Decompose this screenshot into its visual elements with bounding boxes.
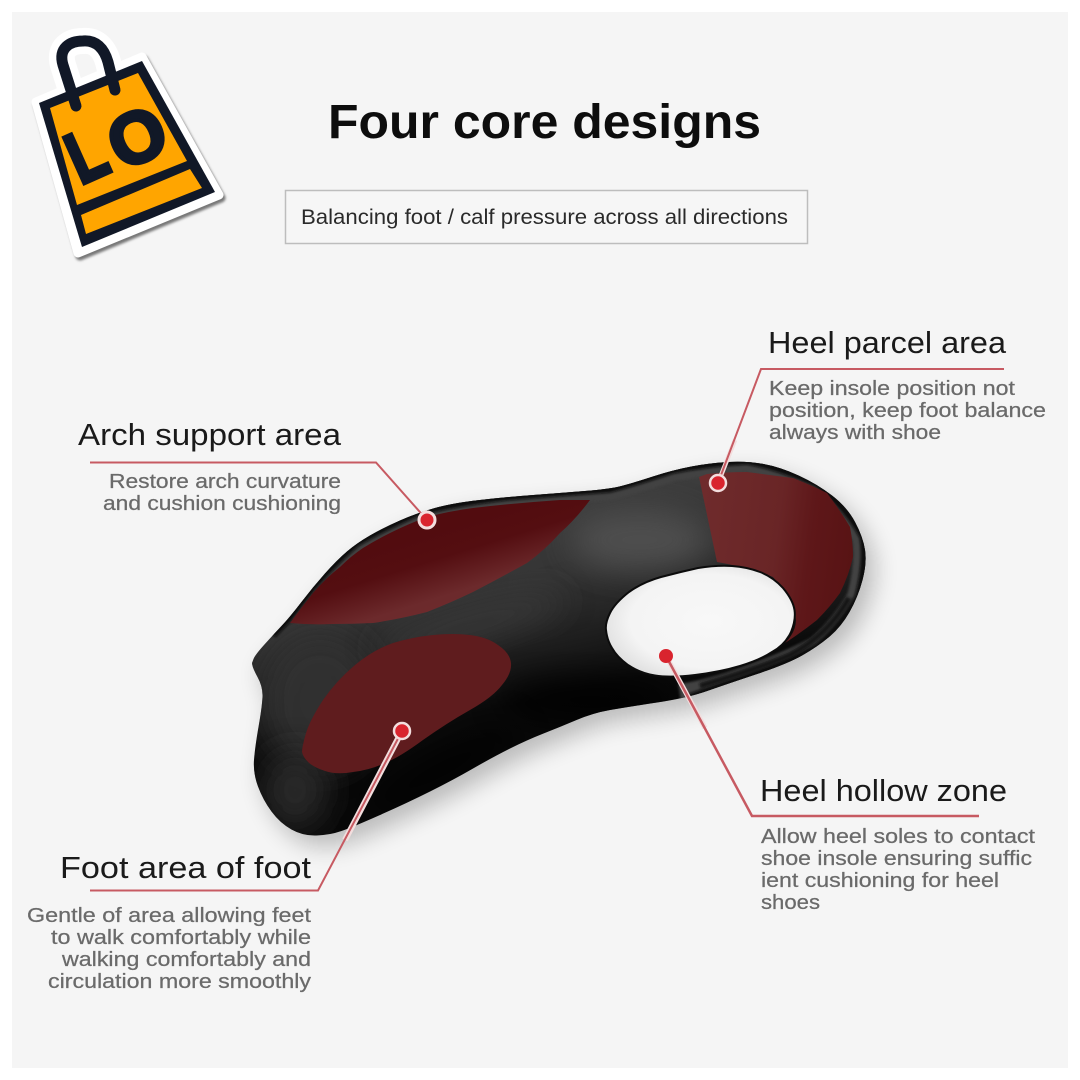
description: shoes — [761, 892, 820, 914]
title: Four core designs — [328, 96, 761, 149]
description: to walk comfortably while — [51, 927, 311, 949]
description: Restore arch curvature — [109, 471, 341, 493]
logo: shopping bag LO — [36, 41, 221, 256]
heel hollow opening — [606, 566, 795, 677]
heading: Arch support area — [78, 417, 342, 452]
description: ient cushioning for heel — [761, 870, 999, 892]
callout: foot area of foot — [27, 723, 410, 993]
heel parcel red zone — [699, 472, 853, 643]
callout: arch support area — [78, 417, 435, 528]
callout: heel hollow zone — [659, 649, 1036, 914]
pin — [710, 475, 726, 491]
description: shoe insole ensuring suffic — [761, 848, 1032, 870]
leader line — [666, 656, 979, 816]
description: Allow heel soles to contact — [761, 826, 1036, 848]
insole shadow — [261, 473, 875, 847]
heading: Heel parcel area — [768, 325, 1007, 360]
description: Keep insole position not — [769, 378, 1016, 400]
description: Gentle of area allowing feet — [27, 905, 312, 927]
pin — [659, 649, 673, 663]
description: and cushion cushioning — [103, 493, 341, 515]
subtitle box — [286, 190, 808, 244]
pin — [419, 512, 435, 528]
leader line — [718, 369, 1004, 483]
logo: shopping bag LO: L — [54, 111, 119, 199]
heading: Heel hollow zone — [760, 773, 1007, 808]
description: always with shoe — [769, 422, 941, 444]
callout: heel parcel area — [710, 325, 1046, 491]
body shading — [260, 461, 864, 830]
forefoot red zone — [302, 634, 511, 773]
arch support red zone — [290, 500, 590, 624]
heading: Foot area of foot — [60, 850, 311, 885]
pin — [394, 723, 410, 739]
insole body — [252, 462, 866, 836]
description: position, keep foot balance — [769, 400, 1046, 422]
subtitle box: Balancing foot / calf pressure across all directions — [301, 206, 788, 229]
description: circulation more smoothly — [48, 971, 311, 993]
rim band — [290, 461, 864, 695]
description: walking comfortably and — [61, 949, 311, 971]
leader line — [90, 462, 427, 520]
leader line — [90, 731, 402, 890]
insole illustration — [252, 461, 875, 847]
logo: shopping bag LO: O — [96, 90, 179, 186]
